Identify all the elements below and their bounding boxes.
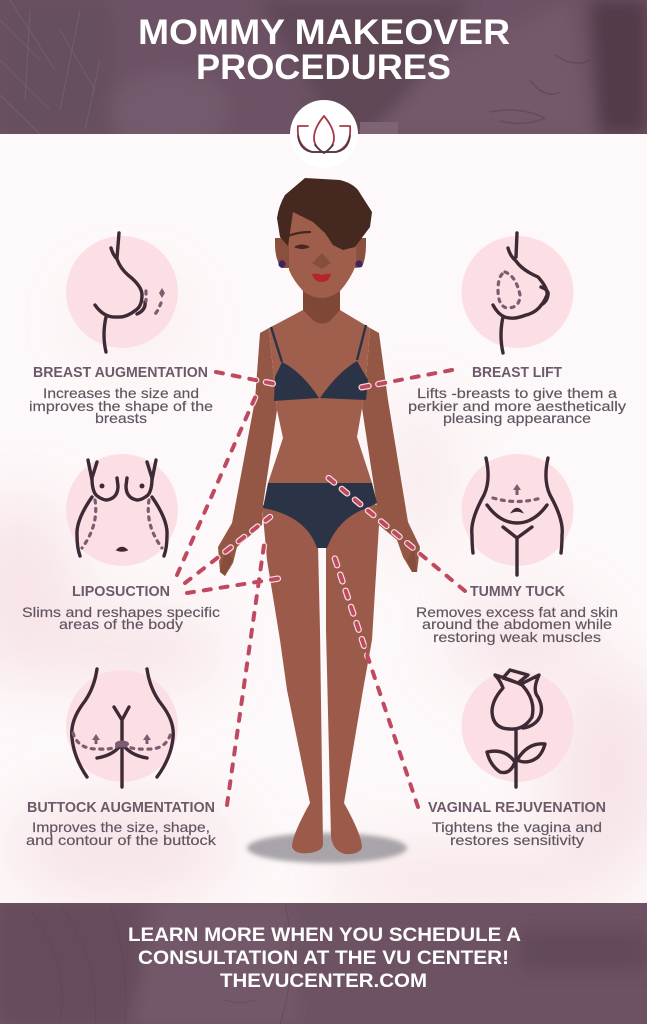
text: buttock augmentation: Improves the size, shape, xyxy=(32,820,210,835)
ears xyxy=(275,238,366,268)
text: tummy tuck: restoring weak muscles xyxy=(433,630,601,645)
text: breast lift: pleasing appearance xyxy=(443,411,591,426)
face xyxy=(289,205,358,298)
footer band xyxy=(0,903,647,1024)
circle: liposuction xyxy=(66,454,178,566)
footer call to action: THEVUCENTER.COM xyxy=(220,970,427,992)
text: breast lift xyxy=(408,386,626,426)
underwear xyxy=(263,483,377,548)
title xyxy=(138,13,510,87)
text: tummy tuck: Removes excess fat and skin xyxy=(416,605,618,620)
eye and brow xyxy=(288,232,310,236)
bra xyxy=(274,361,368,401)
heading: vaginal rejuvenation: VAGINAL REJUVENATION xyxy=(428,800,606,816)
title: MOMMY MAKEOVER xyxy=(138,13,510,52)
neck xyxy=(303,285,340,324)
text: liposuction: Slims and reshapes specific xyxy=(22,605,220,620)
nose xyxy=(312,253,331,269)
text: vaginal rejuvenation: restores sensitivity xyxy=(450,833,584,848)
text: tummy tuck xyxy=(416,605,618,645)
circle: breast augmentation xyxy=(66,236,178,348)
icon: liposuction xyxy=(77,460,167,556)
heading: buttock augmentation: BUTTOCK AUGMENTATION xyxy=(27,800,215,816)
text: buttock augmentation: and contour of the buttock xyxy=(26,833,216,848)
text: breast augmentation: breasts xyxy=(95,411,147,426)
header band xyxy=(0,0,647,134)
text: liposuction: areas of the body xyxy=(59,617,183,632)
icon: breast augmentation xyxy=(95,233,165,352)
footer call to action: LEARN MORE WHEN YOU SCHEDULE A xyxy=(128,924,521,946)
footer call to action xyxy=(128,924,521,992)
circle: breast lift xyxy=(462,236,574,348)
icon: breast lift xyxy=(493,233,548,353)
page background xyxy=(0,134,647,910)
text: breast augmentation xyxy=(29,386,213,426)
bra straps xyxy=(271,325,366,362)
title: PROCEDURES xyxy=(196,48,451,87)
footer call to action: CONSULTATION AT THE VU CENTER! xyxy=(138,947,509,969)
figure shadow xyxy=(247,833,407,863)
text: breast lift: perkier and more aesthetically xyxy=(408,399,626,414)
text: vaginal rejuvenation: Tightens the vagina and xyxy=(432,820,602,835)
legs xyxy=(262,505,323,853)
circle: tummy tuck xyxy=(462,454,574,566)
woman figure xyxy=(218,178,420,854)
lips xyxy=(312,274,331,282)
icon: tummy tuck xyxy=(472,458,562,575)
text: tummy tuck: around the abdomen while xyxy=(422,617,612,632)
text: breast lift: Lifts -breasts to give them a xyxy=(417,386,618,401)
icon: rose xyxy=(487,670,545,787)
circle: vaginal rejuvenation xyxy=(462,670,574,782)
hair xyxy=(277,178,372,250)
heading: breast augmentation: BREAST AUGMENTATION xyxy=(33,365,208,381)
text: vaginal rejuvenation xyxy=(432,820,602,848)
text: breast augmentation: improves the shape of the xyxy=(29,399,213,414)
arms xyxy=(218,328,420,576)
icon: buttock augmentation xyxy=(72,669,173,787)
heading: tummy tuck: TUMMY TUCK xyxy=(470,584,566,600)
text: breast augmentation: Increases the size and xyxy=(43,386,199,401)
torso xyxy=(262,310,378,520)
dashed leader lines xyxy=(177,370,465,807)
icon: lotus logo badge xyxy=(290,100,358,168)
text: liposuction xyxy=(22,605,220,632)
earrings xyxy=(278,260,363,268)
hand shade xyxy=(220,548,417,576)
heading: breast lift: BREAST LIFT xyxy=(472,365,562,381)
heading: liposuction: LIPOSUCTION xyxy=(72,584,170,600)
circle: buttock augmentation xyxy=(66,670,178,782)
text: buttock augmentation xyxy=(26,820,216,848)
